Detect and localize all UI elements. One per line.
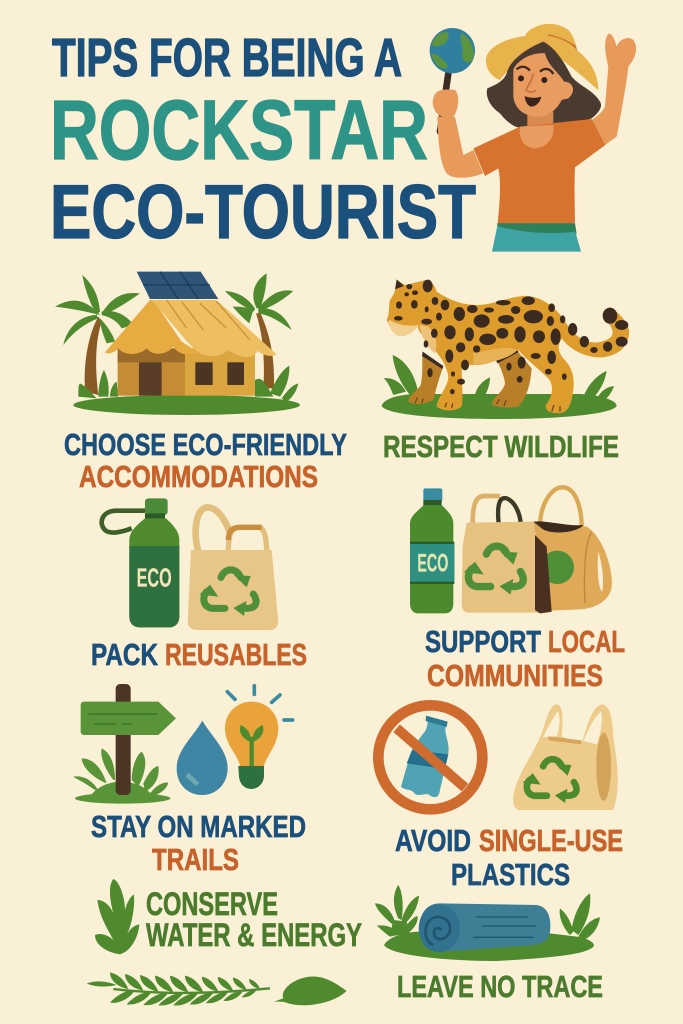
panel: avoid single-use plastics [378,704,623,892]
icon: fern branch [87,972,270,1006]
label [91,809,306,877]
icon: plastic bag [513,704,618,810]
label: CHOOSE ECO-FRIENDLY [64,427,347,462]
icon: bottle [410,488,454,613]
face [513,53,573,117]
panel: respect wildlife [382,279,629,464]
label: LEAVE NO TRACE [397,969,603,1004]
title: TIPS FOR BEING A [52,28,402,88]
label [395,823,623,892]
left arm [437,117,483,178]
icon: no plastic bottle [378,705,482,809]
label: STAY ON MARKED [91,809,306,844]
panel: support local communities [410,487,625,693]
icon: jaguar [382,279,629,419]
label: TRAILS [152,842,239,877]
label [91,637,307,672]
icon: trail sign [73,684,176,804]
hair [487,42,601,127]
neckline [520,125,554,148]
label: LOCAL [548,624,625,659]
hat [486,24,598,90]
label: PACK [91,637,158,672]
icon: globe on a stick [430,28,475,132]
title: ECO-TOURIST [50,170,476,255]
label: SINGLE-USE [479,823,623,858]
panel: leave no trace [375,885,603,1004]
icon: tote bags [462,487,612,613]
icon: green bottle [102,498,179,627]
icon: green bottle: ECO [137,563,172,593]
icon: leafy plant [95,879,139,954]
hand gripping stick [433,89,458,117]
panel: stay on marked trails [73,684,306,877]
label: SUPPORT [425,624,541,659]
hat ribbon [548,34,577,51]
icon: bottle: ECO [417,551,448,578]
panel: conserve water and energy [95,879,362,954]
icon: light bulb with sprout [225,686,293,789]
label: ACCOMMODATIONS [79,459,318,494]
label: REUSABLES [165,637,307,672]
panel: eco-friendly accommodations [55,272,347,494]
icon: recycling tote bag [188,507,278,630]
label: WATER & ENERGY [146,917,362,953]
title: ROCKSTAR [50,83,428,177]
title [50,28,476,255]
icon: hut with solar panels and palms [55,272,300,415]
shirt [473,119,605,227]
label [146,886,362,953]
label: CONSERVE [146,886,278,922]
label: PLASTICS [451,857,570,892]
label: COMMUNITIES [427,658,603,693]
illustration: woman holding a globe [430,24,636,252]
right arm and fist [592,34,636,145]
label: RESPECT WILDLIFE [383,429,619,464]
icon: water drop [177,721,228,795]
icon: rolled mat on grass [375,885,600,961]
label [425,624,625,693]
panel: pack reusables [91,498,307,672]
neck [527,112,553,128]
label: AVOID [395,823,471,858]
label [64,427,347,494]
skirt [492,223,581,252]
icon: single leaf [274,976,347,1005]
